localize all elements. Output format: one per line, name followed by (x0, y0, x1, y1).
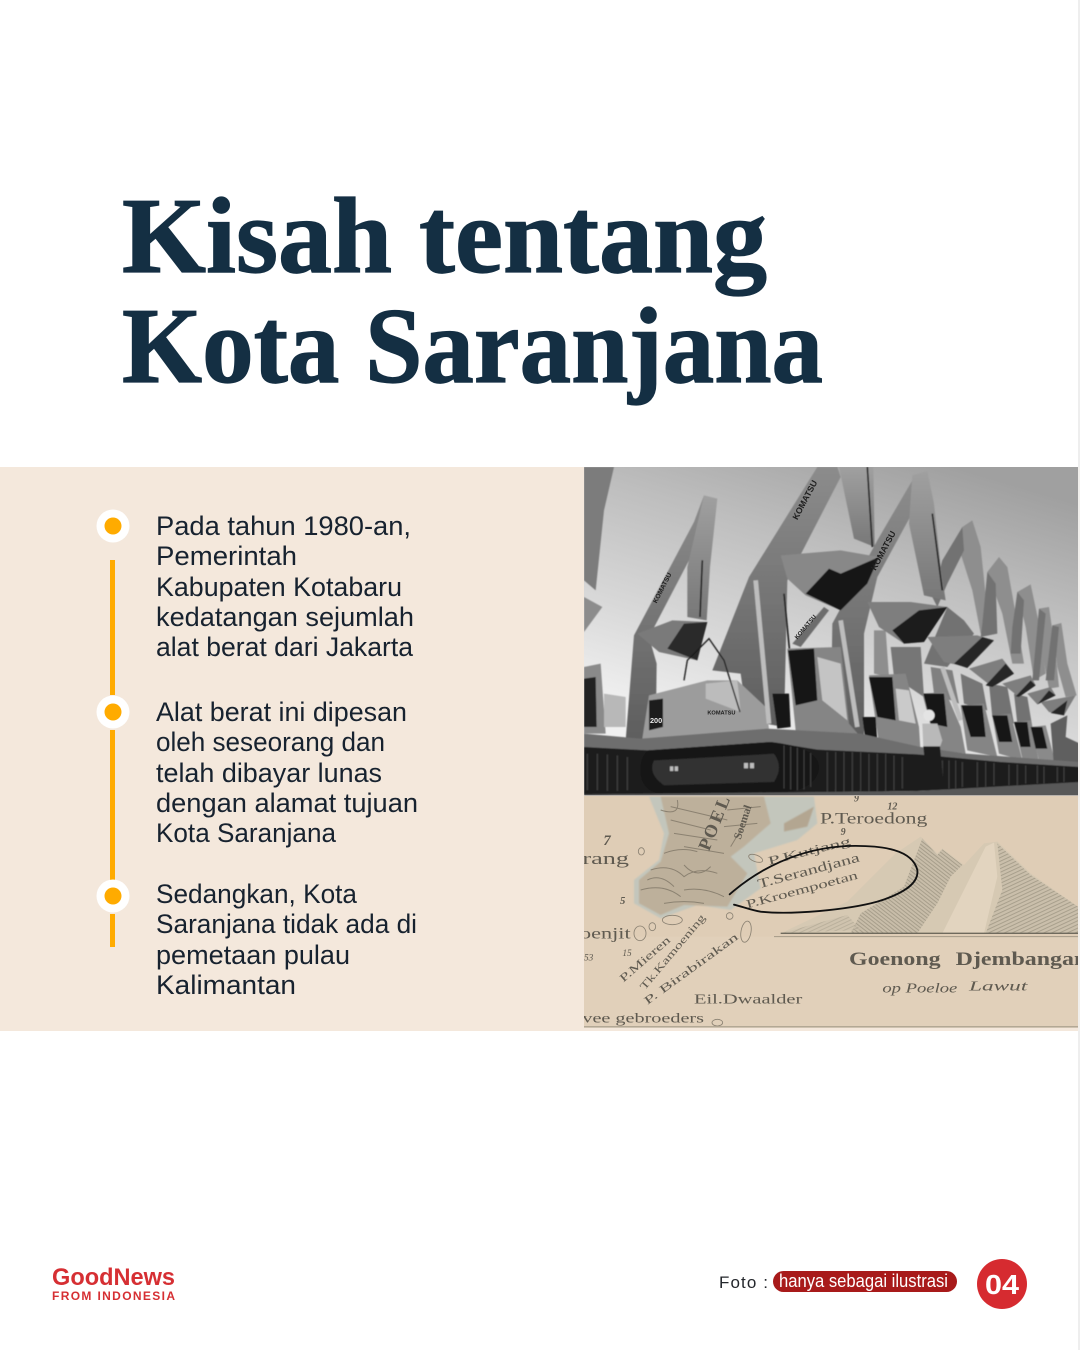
text block 1 (156, 511, 414, 662)
sea and land masses (634, 797, 817, 918)
map labels: Lawut (967, 980, 1029, 995)
map labels: rang (582, 849, 630, 868)
KOMATSU lettering on booms: KOMATSU (869, 529, 898, 572)
map labels: op Poeloe (882, 981, 957, 996)
map labels: oenjit (580, 925, 632, 942)
text block 1: Kabupaten Kotabaru (156, 572, 402, 602)
worker (922, 710, 944, 790)
timeline marker 3 (96, 880, 130, 912)
map bottom edge (584, 1026, 1078, 1028)
title: Kota Saranjana (122, 287, 823, 406)
map labels: vee gebroeders (582, 1012, 704, 1027)
map labels: P.Teroedong (820, 810, 928, 827)
islets (634, 848, 764, 1026)
credit pill: hanya sebagai ilustrasi (779, 1271, 948, 1291)
panel: timeline (0, 467, 1080, 1031)
map labels: T.Serandjana (756, 850, 861, 891)
title: Kisah tentang (122, 177, 767, 296)
hand-drawn circle around Saranjana (730, 846, 917, 913)
map labels: P.Kutjang (766, 834, 852, 868)
map labels (580, 793, 1080, 1027)
bucket 1 (637, 620, 707, 660)
right edge strip (1078, 0, 1080, 1350)
text block 3: Kalimantan (156, 970, 296, 1000)
map labels: P.Kroempoetan (744, 868, 859, 911)
text block 3: Saranjana tidak ada di (156, 909, 417, 939)
hydraulic black block (772, 694, 791, 729)
timeline marker 2 (96, 696, 130, 728)
bucket 3 (781, 550, 879, 610)
KOMATSU lettering on booms: 200 (650, 716, 662, 725)
map labels: 53 (584, 954, 594, 964)
text block 3: Sedangkan, Kota (156, 879, 358, 909)
excavator 4 boom and arm (831, 480, 917, 740)
lift cylinders and hoses (756, 580, 961, 727)
tree and distant building (1051, 715, 1080, 777)
photo credit (719, 1271, 957, 1292)
logo: GoodNews from Indonesia: FROM INDONESIA (52, 1289, 175, 1303)
title (122, 177, 823, 406)
KOMATSU lettering on booms: KOMATSU (790, 478, 819, 521)
far right excavator booms and arms (961, 520, 1077, 697)
mountain horizon lines (774, 933, 1078, 937)
text block 2: Alat berat ini dipesan (156, 697, 407, 727)
KOMATSU lettering on booms (650, 478, 898, 725)
timeline marker 1 (96, 510, 130, 542)
lower body band (584, 729, 1080, 770)
text block 2: Kota Saranjana (156, 818, 337, 848)
map labels: Djembangan (956, 949, 1080, 970)
ground strip (584, 782, 1080, 797)
map labels: Tk.Kamoening (639, 912, 709, 993)
map labels: 9 (841, 827, 846, 838)
map labels: 15 (622, 949, 632, 959)
map: Kota Saranjana (580, 790, 1080, 1035)
logo: GoodNews from Indonesia (52, 1264, 175, 1303)
text block 1: kedatangan sejumlah (156, 602, 414, 632)
text block 1: Pada tahun 1980-an, (156, 511, 411, 541)
text block 2: dengan alamat tujuan (156, 788, 418, 818)
map labels: P. Birabirakan (642, 931, 741, 1007)
logo: GoodNews from Indonesia: GoodNews (52, 1264, 175, 1291)
excavator 3 boom and arm (712, 467, 841, 727)
map labels: Goenong (849, 949, 941, 970)
map labels: Soemal (732, 804, 754, 841)
page number: 04 (985, 1269, 1019, 1300)
timeline line segments (110, 560, 115, 947)
page number (977, 1259, 1027, 1309)
map labels: 5 (620, 896, 626, 907)
map labels: P.Mieren (617, 934, 673, 985)
text block 1: Pemerintah (156, 541, 297, 571)
track link ribs (587, 745, 1064, 792)
bucket 4 (867, 602, 947, 644)
text block 2: telah dibayar lunas (156, 758, 382, 788)
text block 2 (156, 697, 418, 848)
mountains (781, 837, 1078, 934)
map labels: Eil.Dwaalder (694, 991, 803, 1006)
photo: row of excavators (584, 467, 1080, 797)
KOMATSU lettering on booms: KOMATSU (794, 614, 818, 641)
main body excavator (642, 680, 769, 742)
map labels: P O E L (694, 793, 734, 853)
strip cover beside photos (1078, 467, 1080, 1031)
map labels: 7 (603, 833, 611, 849)
far left excavator (584, 467, 614, 590)
text block 1: alat berat dari Jakarta (156, 632, 414, 662)
KOMATSU lettering on booms: KOMATSU (652, 572, 674, 605)
map terrain hatching (641, 800, 761, 903)
cabs (787, 647, 861, 737)
map labels: 9 (854, 794, 859, 805)
text block 3: pemetaan pulau (156, 940, 350, 970)
tracks (584, 742, 1080, 795)
map labels: 12 (887, 801, 897, 812)
text block 2: oleh seseorang dan (156, 727, 385, 757)
text block 3 (156, 879, 417, 1000)
KOMATSU lettering on booms: KOMATSU (707, 710, 736, 716)
excavator 1 boom and arm (626, 495, 709, 740)
far right buckets (927, 635, 1076, 715)
photo credit: Foto : (719, 1273, 768, 1292)
